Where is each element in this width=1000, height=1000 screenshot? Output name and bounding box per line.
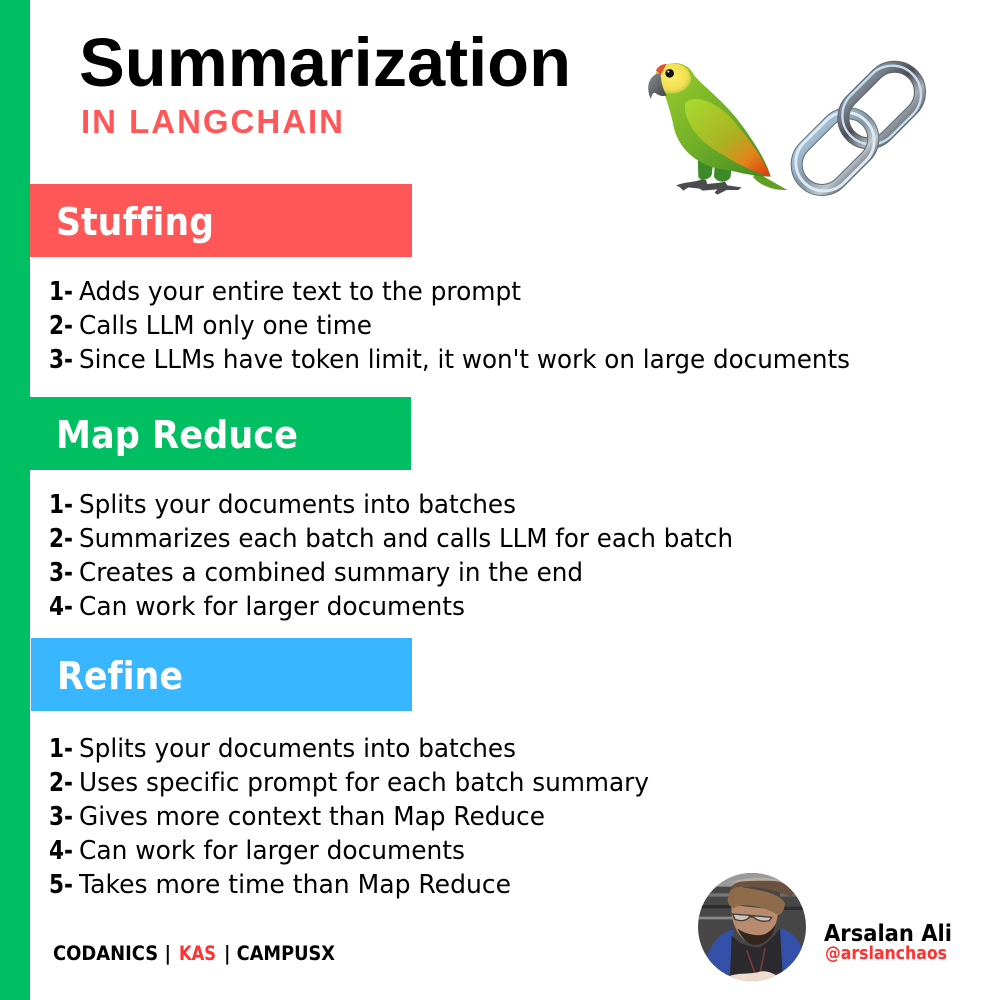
stuffing list [49, 277, 850, 375]
left accent bar [0, 0, 30, 1000]
map reduce list: 3- [49, 558, 73, 588]
footer credits: CODANICS | [53, 942, 171, 965]
panel: stuffing [30, 184, 412, 257]
map reduce list [49, 490, 733, 622]
title: Summarization [79, 24, 571, 101]
refine list: 1- [49, 734, 73, 764]
stuffing heading: Stuffing [56, 200, 214, 244]
map reduce list: 4- [49, 592, 73, 622]
stuffing list: Since LLMs have token limit, it won't work on large documents [79, 345, 850, 375]
refine heading: Refine [57, 654, 183, 698]
panel: map reduce [30, 397, 411, 470]
map reduce list: Can work for larger documents [79, 592, 465, 622]
map reduce list: Splits your documents into batches [79, 490, 516, 520]
map reduce header band [30, 397, 411, 470]
stuffing list: Calls LLM only one time [79, 311, 372, 341]
stuffing header band [30, 184, 412, 257]
stuffing list: Adds your entire text to the prompt [79, 277, 521, 307]
stuffing list: 2- [49, 311, 73, 341]
subtitle: IN LANGCHAIN [81, 103, 343, 140]
refine list [49, 734, 649, 900]
map reduce list: Summarizes each batch and calls LLM for each batch [79, 524, 733, 554]
footer credits [53, 942, 335, 965]
icon: parrot [648, 63, 787, 195]
stuffing list: 3- [49, 345, 73, 375]
icon: chain link [790, 60, 926, 196]
author portrait [697, 872, 807, 982]
map reduce list: Creates a combined summary in the end [79, 558, 583, 588]
refine list: 4- [49, 836, 73, 866]
map reduce list: 1- [49, 490, 73, 520]
footer credits: KAS [179, 942, 216, 965]
refine header band [31, 638, 412, 711]
refine list: Splits your documents into batches [79, 734, 516, 764]
map reduce heading: Map Reduce [56, 413, 298, 457]
refine list: 3- [49, 802, 73, 832]
author handle: @arslanchaos [825, 943, 947, 964]
refine list: Takes more time than Map Reduce [78, 870, 511, 900]
footer credits: | CAMPUSX [224, 942, 335, 965]
refine list: 5- [49, 870, 73, 900]
author name: Arsalan Ali [824, 921, 952, 947]
refine list: Gives more context than Map Reduce [79, 802, 545, 832]
stuffing list: 1- [49, 277, 73, 307]
panel: refine [31, 638, 412, 711]
refine list: Can work for larger documents [79, 836, 465, 866]
refine list: 2- [49, 768, 73, 798]
map reduce list: 2- [49, 524, 73, 554]
refine list: Uses specific prompt for each batch summary [79, 768, 649, 798]
